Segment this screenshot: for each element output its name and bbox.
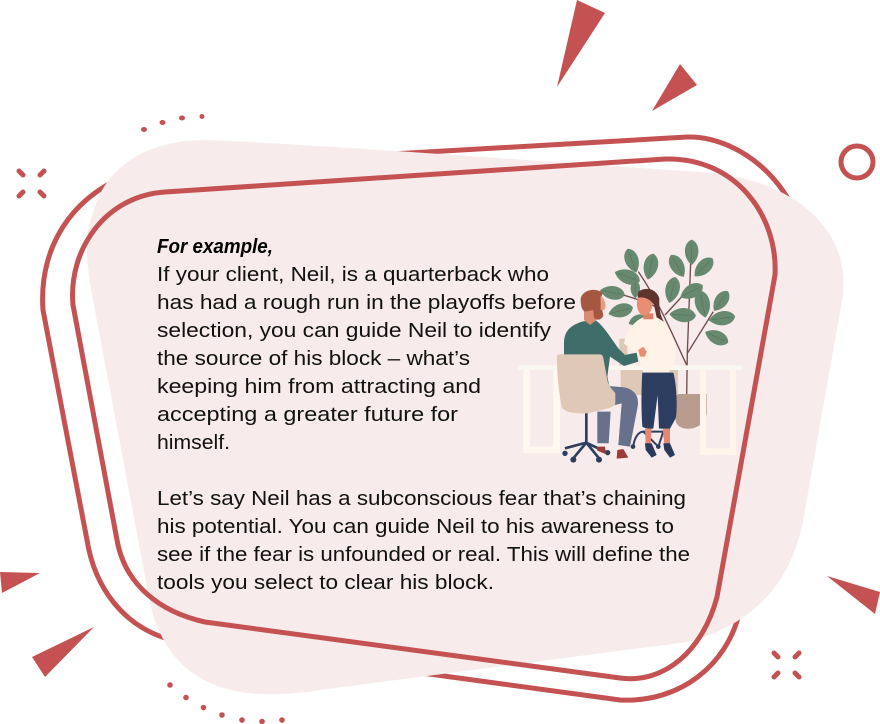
man [564, 290, 647, 459]
example heading: For example, [157, 236, 273, 258]
second paragraph: Let’s say Neil has a subconscious fear that’s chaining [157, 488, 686, 510]
first paragraph: has had a rough run in the playoffs before [157, 292, 576, 314]
woman's chair base [631, 432, 663, 449]
top dotted arc [141, 114, 204, 132]
man's chair base [562, 413, 610, 463]
second paragraph: see if the fear is unfounded or real. This will define the [157, 544, 690, 566]
left sparkle marks [19, 171, 44, 196]
man's chair seat [557, 354, 615, 413]
desk and far chair [518, 339, 742, 455]
right sparkle marks [774, 653, 799, 677]
woman [624, 289, 677, 458]
first paragraph: keeping him from attracting and [157, 376, 481, 398]
first paragraph [157, 264, 576, 454]
first paragraph: accepting a greater future for [157, 404, 458, 426]
plant pot [676, 394, 707, 429]
second paragraph: tools you select to clear his block. [157, 572, 494, 594]
second paragraph: his potential. You can guide Neil to his awareness to [157, 516, 674, 538]
background blob [87, 140, 844, 694]
first paragraph: If your client, Neil, is a quarterback who [157, 264, 549, 286]
decorative circle [841, 146, 873, 178]
first paragraph: himself. [157, 432, 230, 454]
second paragraph [157, 488, 690, 594]
outer ring outline [43, 137, 807, 700]
bottom dotted arc [167, 682, 285, 724]
plant [599, 240, 736, 395]
inner ring outline [73, 159, 775, 679]
illustration: two people at a desk with plant [518, 240, 742, 463]
first paragraph: the source of his block – what’s [157, 348, 470, 370]
first paragraph: selection, you can guide Neil to identify [157, 320, 551, 342]
